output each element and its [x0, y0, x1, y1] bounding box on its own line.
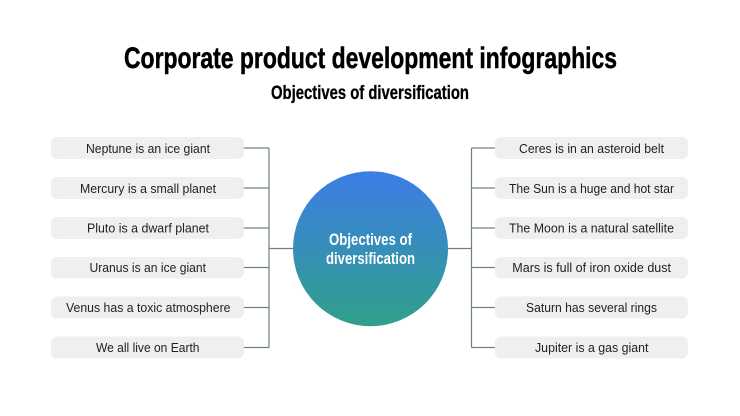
- item: Venus: Venus has a toxic atmosphere: [66, 300, 230, 315]
- item: Mercury: [51, 177, 244, 199]
- right list: [495, 137, 688, 358]
- item: Sun: [495, 177, 688, 199]
- subtitle: Objectives of diversification: [271, 83, 469, 104]
- connector: right bracket: [448, 148, 495, 348]
- left list: [51, 137, 244, 358]
- connector: left bracket: [244, 148, 293, 348]
- item: Jupiter: Jupiter is a gas giant: [535, 340, 649, 355]
- item: Mercury: Mercury is a small planet: [80, 181, 216, 196]
- item: Saturn: [495, 296, 688, 318]
- item: Pluto: Pluto is a dwarf planet: [87, 220, 209, 236]
- item: Mars: Mars is full of iron oxide dust: [512, 260, 671, 275]
- item: Venus: [51, 296, 244, 318]
- item: Pluto: [51, 217, 244, 239]
- central circle: [293, 171, 448, 326]
- item: Mars: [495, 257, 688, 278]
- item: Sun: The Sun is a huge and hot star: [509, 181, 675, 196]
- item: Uranus: Uranus is an ice giant: [90, 260, 206, 275]
- central circle: diversification: [326, 250, 415, 268]
- item: Moon: The Moon is a natural satellite: [509, 220, 674, 236]
- item: Jupiter: [495, 336, 688, 358]
- item: Neptune: Neptune is an ice giant: [86, 141, 210, 156]
- central circle: Objectives of: [329, 231, 412, 249]
- item: Ceres: [495, 137, 688, 159]
- item: Moon: [495, 217, 688, 239]
- item: Ceres: Ceres is in an asteroid belt: [519, 141, 664, 156]
- item: Earth: [51, 336, 244, 358]
- item: Neptune: [51, 137, 244, 159]
- item: Uranus: [51, 257, 244, 278]
- item: Saturn: Saturn has several rings: [526, 300, 657, 315]
- item: Earth: We all live on Earth: [96, 340, 200, 355]
